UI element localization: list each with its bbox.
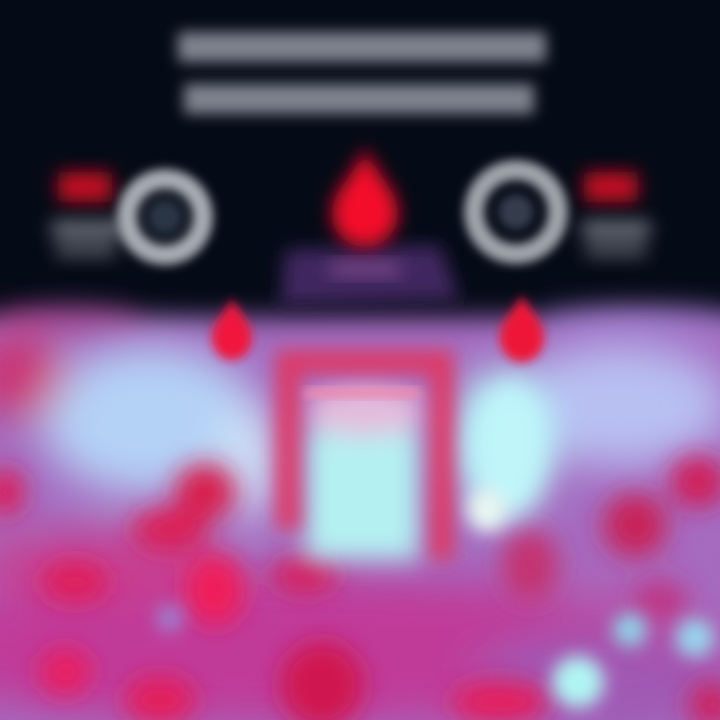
stat number [584, 172, 638, 202]
stat label [52, 222, 124, 256]
ring chart [127, 179, 203, 255]
stat number [58, 172, 112, 202]
panel text lines [305, 388, 420, 398]
glow at panel base [467, 488, 507, 532]
icon: top blood drop [332, 148, 398, 247]
icon: left blood drop [212, 298, 252, 360]
central top figure [280, 148, 460, 305]
figure label [330, 262, 400, 276]
background: lower tissue field [0, 306, 720, 720]
bright glow right of panel [474, 382, 546, 518]
ring chart [474, 170, 558, 254]
panel glow [303, 384, 427, 560]
glowing bubbles [156, 604, 715, 708]
title [178, 32, 546, 114]
right stat [474, 170, 650, 256]
background: light blue and pink patches [0, 333, 720, 720]
left stat [52, 172, 203, 256]
figure body [280, 245, 460, 305]
icon: right blood drop [500, 295, 544, 362]
panel frame [288, 362, 442, 560]
central panel [288, 362, 442, 560]
red blood cells cluster [0, 456, 720, 720]
stat label [582, 222, 650, 256]
